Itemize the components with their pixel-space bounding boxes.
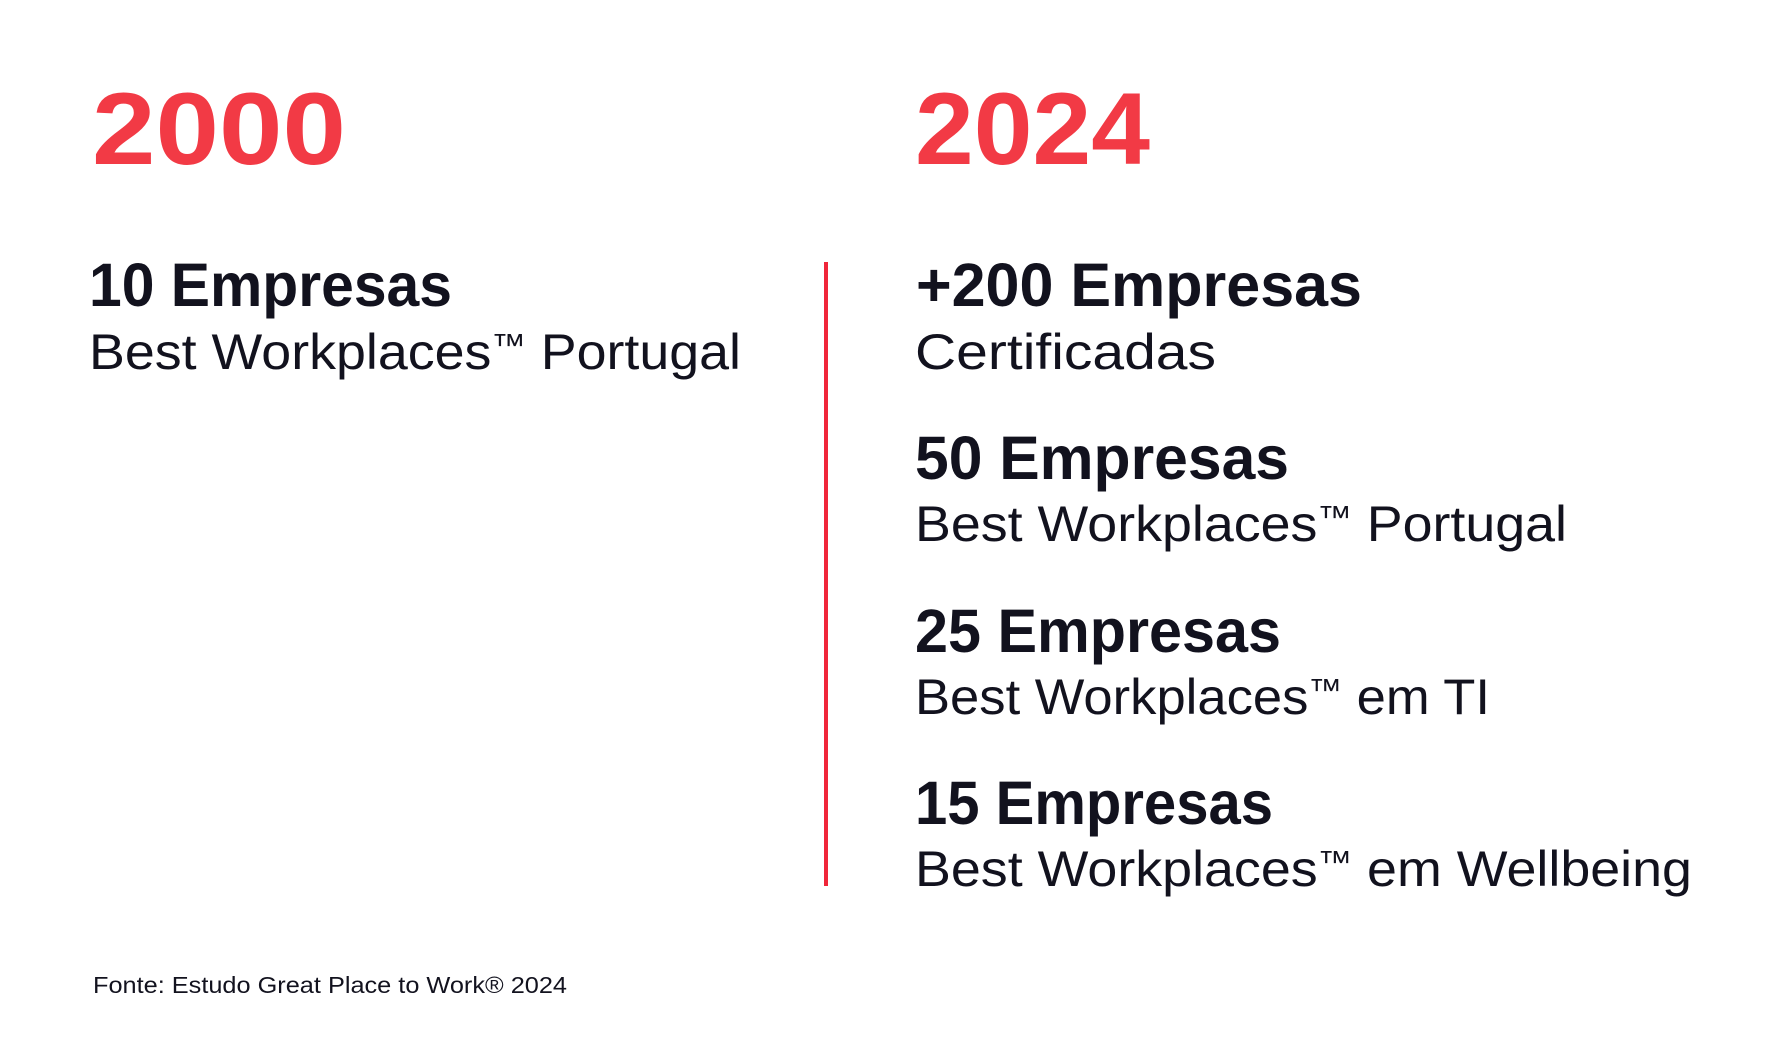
panel: 2000 column (89, 72, 741, 380)
stat: 50 Empresas: Portugal (1352, 496, 1567, 552)
stat: 10 Empresas: Best Workplaces (89, 324, 463, 380)
stat: 10 Empresas: Portugal (526, 324, 741, 380)
stat: 25 Empresas: em TI (1342, 669, 1490, 725)
stat: 15 Empresas: Best Workplaces (915, 841, 1289, 897)
stat: 15 Empresas: 15 Empresas (915, 769, 1273, 837)
stat: 15 Empresas: ™ (1318, 844, 1352, 880)
stat: 50 Empresas (915, 424, 1567, 552)
stat: 25 Empresas: Best Workplaces (915, 669, 1289, 725)
stat: 10 Empresas (89, 251, 741, 380)
stat: +200 Empresas: Certificadas (915, 324, 1216, 380)
stat: 15 Empresas (915, 769, 1692, 897)
stat: 25 Empresas (915, 597, 1490, 725)
stat: +200 Empresas: +200 Empresas (916, 251, 1362, 319)
stat: 10 Empresas: ™ (491, 327, 526, 363)
vertical divider (824, 262, 828, 886)
heading: year 2024: 2024 (915, 72, 1150, 186)
stat: 50 Empresas: ™ (1317, 499, 1352, 535)
stat: 50 Empresas: 50 Empresas (915, 424, 1289, 492)
panel: 2024 column (915, 72, 1692, 897)
source footnote: Fonte: Estudo Great Place to Work® 2024 (93, 972, 567, 998)
heading: year 2000: 2000 (92, 72, 346, 186)
stat: 10 Empresas: 10 Empresas (89, 251, 452, 319)
stat: 25 Empresas: 25 Empresas (915, 597, 1281, 665)
stat: 25 Empresas: ™ (1308, 672, 1342, 708)
stat: 50 Empresas: Best Workplaces (915, 496, 1289, 552)
stat: 15 Empresas: em Wellbeing (1352, 841, 1692, 897)
stat: +200 Empresas (915, 251, 1362, 380)
